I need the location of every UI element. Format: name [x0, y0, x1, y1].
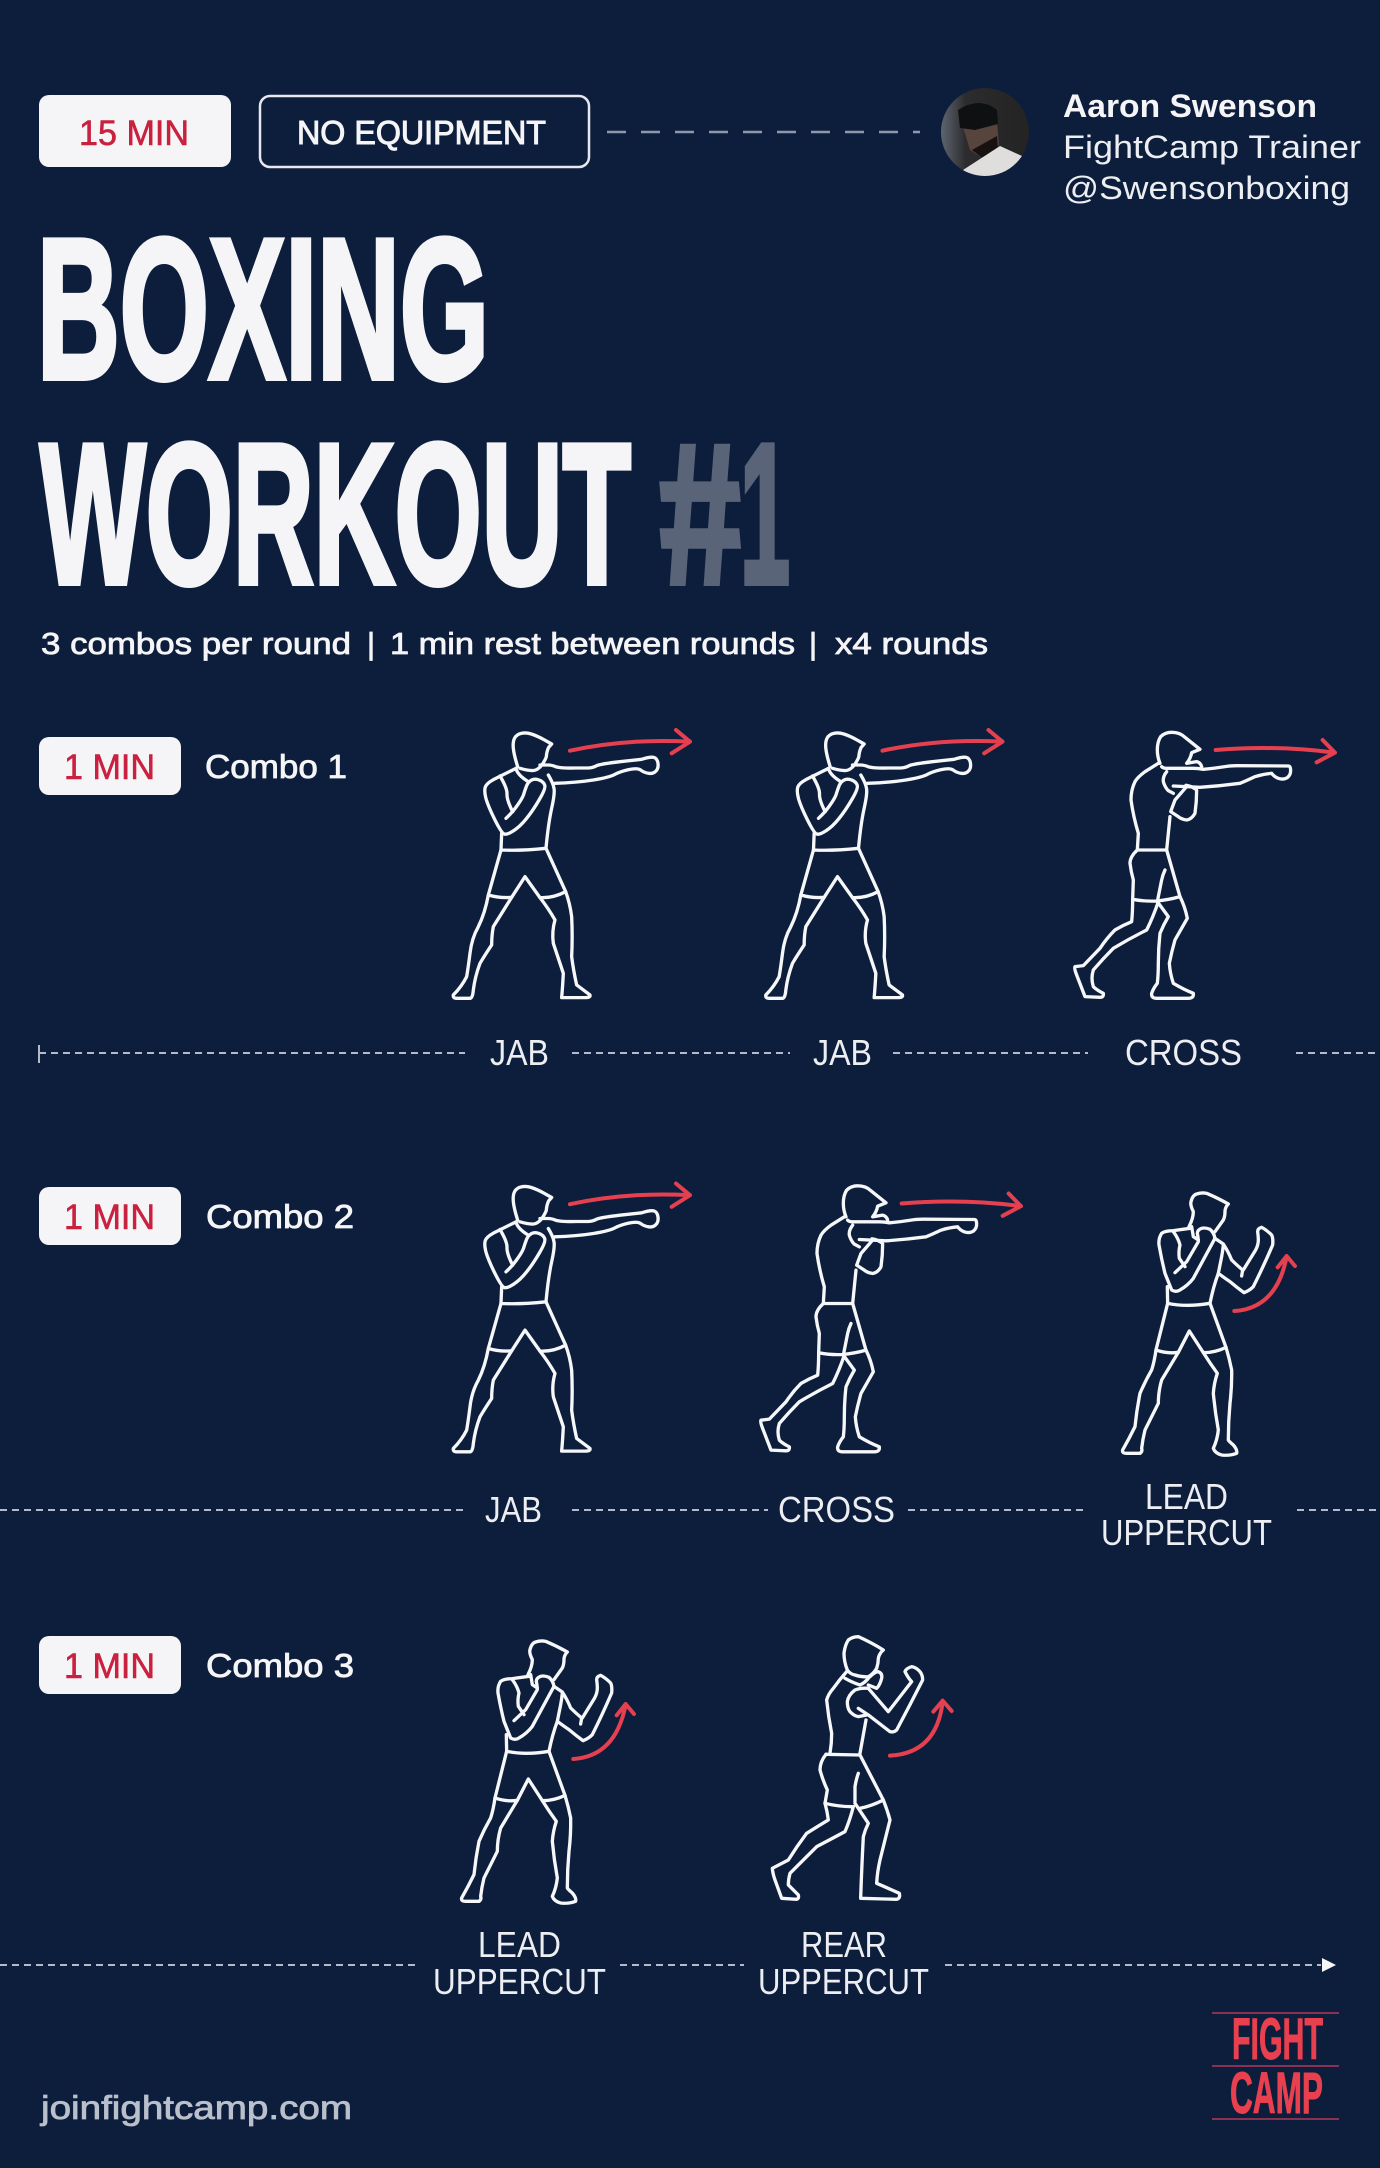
- footer url: joinfightcamp.com: [40, 2089, 352, 2126]
- trainer credits: [1063, 88, 1361, 206]
- trainer credits: @Swensonboxing: [1063, 170, 1350, 206]
- subtitle: |: [367, 626, 375, 661]
- trainer credits: Aaron Swenson: [1063, 88, 1317, 124]
- subtitle: 1 min rest between rounds: [390, 626, 795, 661]
- text: 1: [740, 403, 790, 626]
- combo 3 labels: UPPERCUT: [433, 1961, 606, 2002]
- combo 3 labels: LEAD: [478, 1924, 561, 1965]
- combo 1 move: cross: [1075, 732, 1335, 998]
- header pill: no equipment: NO EQUIPMENT: [297, 114, 546, 151]
- title: [37, 198, 790, 626]
- combo 1 labels: CROSS: [1125, 1032, 1242, 1073]
- header pill: 15 min: 15 MIN: [79, 114, 189, 153]
- combo 2 move: jab: [453, 1183, 690, 1452]
- combo 2 heading: [39, 1187, 354, 1245]
- header pill: 15 min: [39, 95, 231, 167]
- combo 2 heading: 1 MIN: [64, 1198, 155, 1237]
- combo 1 heading: [39, 737, 347, 795]
- combo 1 labels: [490, 1032, 1242, 1073]
- title: WORKOUT: [40, 403, 631, 626]
- subtitle: x4 rounds: [835, 626, 988, 661]
- combo 3 heading: Combo 3: [206, 1647, 354, 1684]
- combo 2 labels: CROSS: [778, 1489, 895, 1530]
- subtitle: 3 combos per round: [41, 626, 351, 661]
- combo 1 heading: Combo 1: [205, 748, 347, 785]
- trainer avatar: [941, 88, 1029, 180]
- combo 1 heading: 1 MIN: [64, 748, 155, 787]
- combo 2 move: cross: [761, 1186, 1021, 1452]
- combo 1 labels: JAB: [813, 1032, 872, 1073]
- combo 2 labels: JAB: [485, 1489, 542, 1530]
- combo 1 labels: JAB: [490, 1032, 549, 1073]
- timeline arrowhead: [1322, 1958, 1336, 1972]
- trainer credits: FightCamp Trainer: [1063, 129, 1361, 165]
- subtitle: [41, 626, 988, 661]
- combo 3 labels: UPPERCUT: [758, 1961, 929, 2002]
- subtitle: |: [809, 626, 817, 661]
- combo 2 labels: [485, 1476, 1272, 1553]
- FightCamp logo: [1212, 2007, 1339, 2126]
- combo 3 move: rear uppercut: [772, 1637, 952, 1899]
- combo 2 labels: LEAD: [1145, 1476, 1228, 1517]
- combo 3 labels: [433, 1924, 929, 2002]
- combo 1 move: jab: [766, 730, 1002, 998]
- combo 3 move: lead uppercut: [461, 1641, 634, 1903]
- header pill: no equipment: [260, 96, 589, 167]
- combo 2 heading: Combo 2: [206, 1198, 354, 1235]
- combo 2 labels: UPPERCUT: [1101, 1512, 1272, 1553]
- combo 3 labels: REAR: [801, 1924, 887, 1965]
- combo 3 heading: 1 MIN: [64, 1647, 155, 1686]
- combo 3 heading: [39, 1636, 354, 1694]
- combo 1 move: jab: [453, 730, 690, 998]
- combo 2 move: lead uppercut: [1122, 1193, 1295, 1455]
- title: #: [648, 403, 752, 626]
- title: BOXING: [37, 198, 489, 421]
